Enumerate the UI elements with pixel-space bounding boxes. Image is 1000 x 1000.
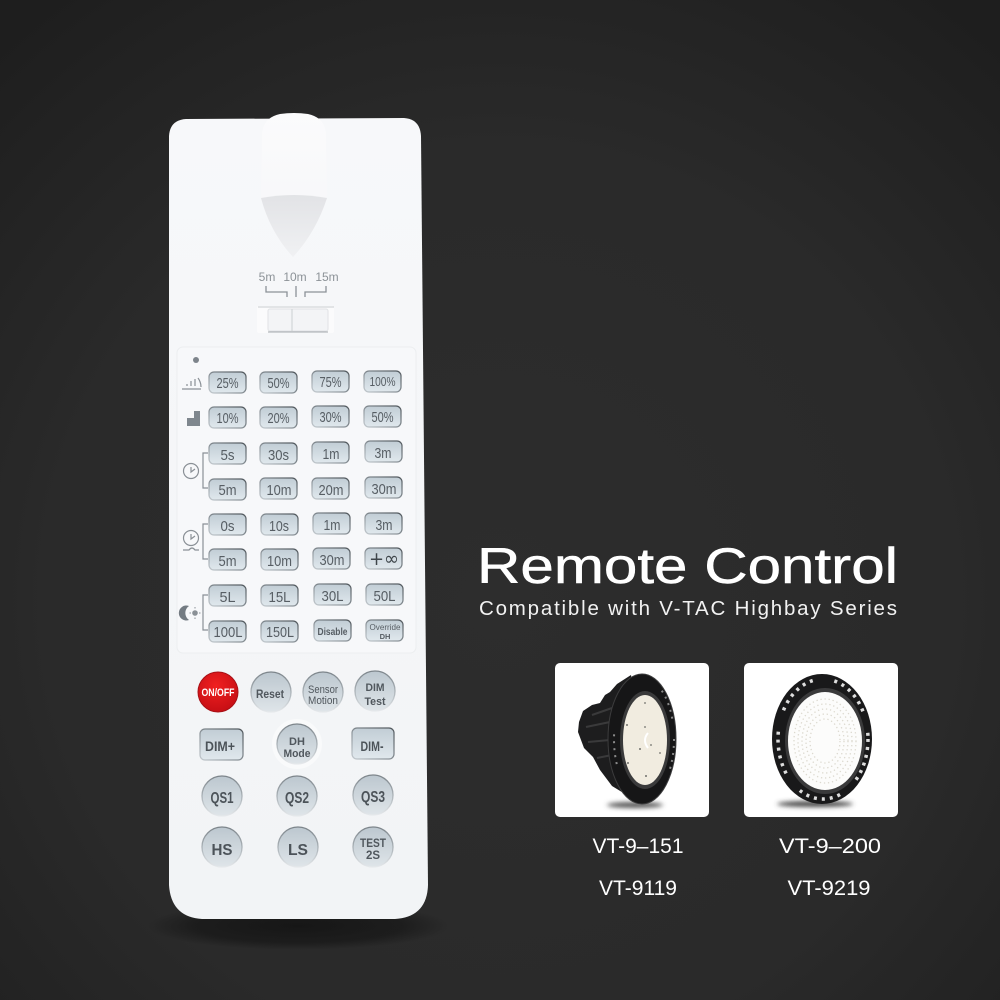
row: lux high: 100L bbox=[214, 624, 242, 641]
sensor dome bbox=[261, 113, 327, 257]
icon: standby time bbox=[183, 524, 208, 559]
row: lux high: Override bbox=[370, 623, 401, 632]
range labels: 5m bbox=[259, 270, 275, 284]
row: lux low: 15L bbox=[268, 589, 290, 606]
dim minus button: DIM- bbox=[360, 739, 384, 754]
row: hold time short bbox=[209, 441, 402, 464]
row: lux low bbox=[209, 584, 403, 606]
row: hold time long: 20m bbox=[318, 482, 344, 499]
reset button: Reset bbox=[256, 689, 284, 701]
row: lux low: 50L bbox=[374, 588, 396, 605]
row: standby time long: +∞ bbox=[369, 548, 399, 570]
dh mode button bbox=[272, 719, 322, 769]
qs1 button: QS1 bbox=[210, 790, 234, 807]
qs3 button bbox=[353, 775, 393, 815]
dh mode button: Mode bbox=[284, 748, 310, 760]
row: hold time short: 5s bbox=[220, 447, 234, 464]
row: standby time short: 0s bbox=[220, 518, 234, 535]
model label: VT-9-200: VT-9–200 bbox=[779, 835, 881, 858]
row: sensitivity bbox=[209, 371, 401, 393]
row: sensitivity: 50% bbox=[268, 375, 290, 392]
row: dim level: 50% bbox=[372, 409, 394, 426]
indicator dot bbox=[193, 357, 199, 363]
model label: VT-9219: VT-9219 bbox=[788, 877, 870, 900]
row: standby time short bbox=[209, 513, 402, 535]
row: sensitivity: 100% bbox=[370, 374, 396, 389]
reset button bbox=[251, 672, 291, 712]
product card: highbay side view bbox=[555, 663, 709, 817]
range labels: 10m bbox=[283, 270, 307, 284]
row: hold time long: 5m bbox=[218, 482, 236, 499]
row: standby time long: 5m bbox=[218, 553, 236, 570]
row: standby time short: 1m bbox=[324, 517, 340, 534]
row: dim level: 10% bbox=[216, 410, 238, 427]
settings panel bbox=[177, 347, 416, 653]
test 2s button: 2S bbox=[366, 850, 380, 862]
dim test button: DIM bbox=[366, 682, 384, 694]
dim plus button: DIM+ bbox=[205, 739, 235, 754]
test 2s button: TEST bbox=[360, 838, 386, 850]
hs button bbox=[202, 827, 242, 867]
row: standby time long: 30m bbox=[320, 552, 344, 569]
row: lux high bbox=[209, 620, 403, 642]
row: standby time short: 3m bbox=[376, 517, 392, 534]
dim plus button bbox=[200, 729, 243, 760]
title: Remote Control bbox=[477, 538, 898, 594]
subtitle: Compatible with V-TAC Highbay Series bbox=[479, 597, 897, 620]
model label: VT-9-151: VT-9–151 bbox=[592, 835, 684, 858]
row: hold time long bbox=[209, 477, 402, 500]
row: standby time short: 10s bbox=[269, 518, 289, 535]
row: hold time long: 10m bbox=[266, 482, 292, 499]
dim test button: Test bbox=[364, 696, 386, 708]
on/off button: ON/OFF bbox=[202, 687, 235, 699]
icon: daylight sensor bbox=[179, 595, 208, 630]
ls button bbox=[278, 827, 318, 867]
dh mode button: DH bbox=[289, 736, 305, 748]
row: sensitivity: 75% bbox=[320, 374, 342, 391]
qs2 button: QS2 bbox=[285, 790, 309, 807]
hs button: HS bbox=[212, 842, 233, 859]
dim test button bbox=[355, 671, 395, 711]
row: sensitivity: 25% bbox=[216, 375, 238, 392]
dim minus button bbox=[352, 728, 394, 759]
product card: highbay front view bbox=[744, 663, 898, 817]
row: standby time long bbox=[209, 548, 402, 570]
row: standby time long: 10m bbox=[267, 553, 292, 570]
row: lux high: DH bbox=[380, 632, 390, 641]
row: lux high: Disable bbox=[318, 627, 348, 638]
row: hold time long: 30m bbox=[372, 481, 396, 498]
range labels bbox=[259, 270, 339, 297]
row: dim level bbox=[209, 406, 401, 428]
remote control bbox=[169, 113, 428, 919]
qs2 button bbox=[277, 776, 317, 816]
model label: VT-9119: VT-9119 bbox=[599, 877, 677, 900]
row: dim level: 20% bbox=[268, 410, 290, 427]
range slider switch bbox=[257, 306, 334, 333]
range labels: 15m bbox=[315, 270, 339, 284]
sensor motion button bbox=[303, 672, 343, 712]
row: lux high: 150L bbox=[266, 624, 294, 641]
row: hold time short: 1m bbox=[322, 446, 340, 463]
row: dim level: 30% bbox=[320, 409, 342, 426]
row: lux low: 5L bbox=[220, 589, 236, 606]
on/off button bbox=[198, 672, 238, 712]
sensor motion button: Sensor bbox=[308, 684, 338, 696]
icon: sensitivity bbox=[182, 378, 201, 389]
qs3 button: QS3 bbox=[361, 789, 385, 806]
row: lux low: 30L bbox=[322, 588, 344, 605]
qs1 button bbox=[202, 776, 242, 816]
icon: hold time bbox=[184, 453, 208, 488]
remote body bbox=[169, 118, 428, 919]
row: hold time short: 30s bbox=[268, 447, 289, 464]
ls button: LS bbox=[288, 842, 308, 859]
row: hold time short: 3m bbox=[374, 445, 392, 462]
sensor motion button: Motion bbox=[308, 695, 338, 707]
icon: dim level bbox=[187, 411, 200, 426]
test 2s button bbox=[353, 827, 393, 867]
